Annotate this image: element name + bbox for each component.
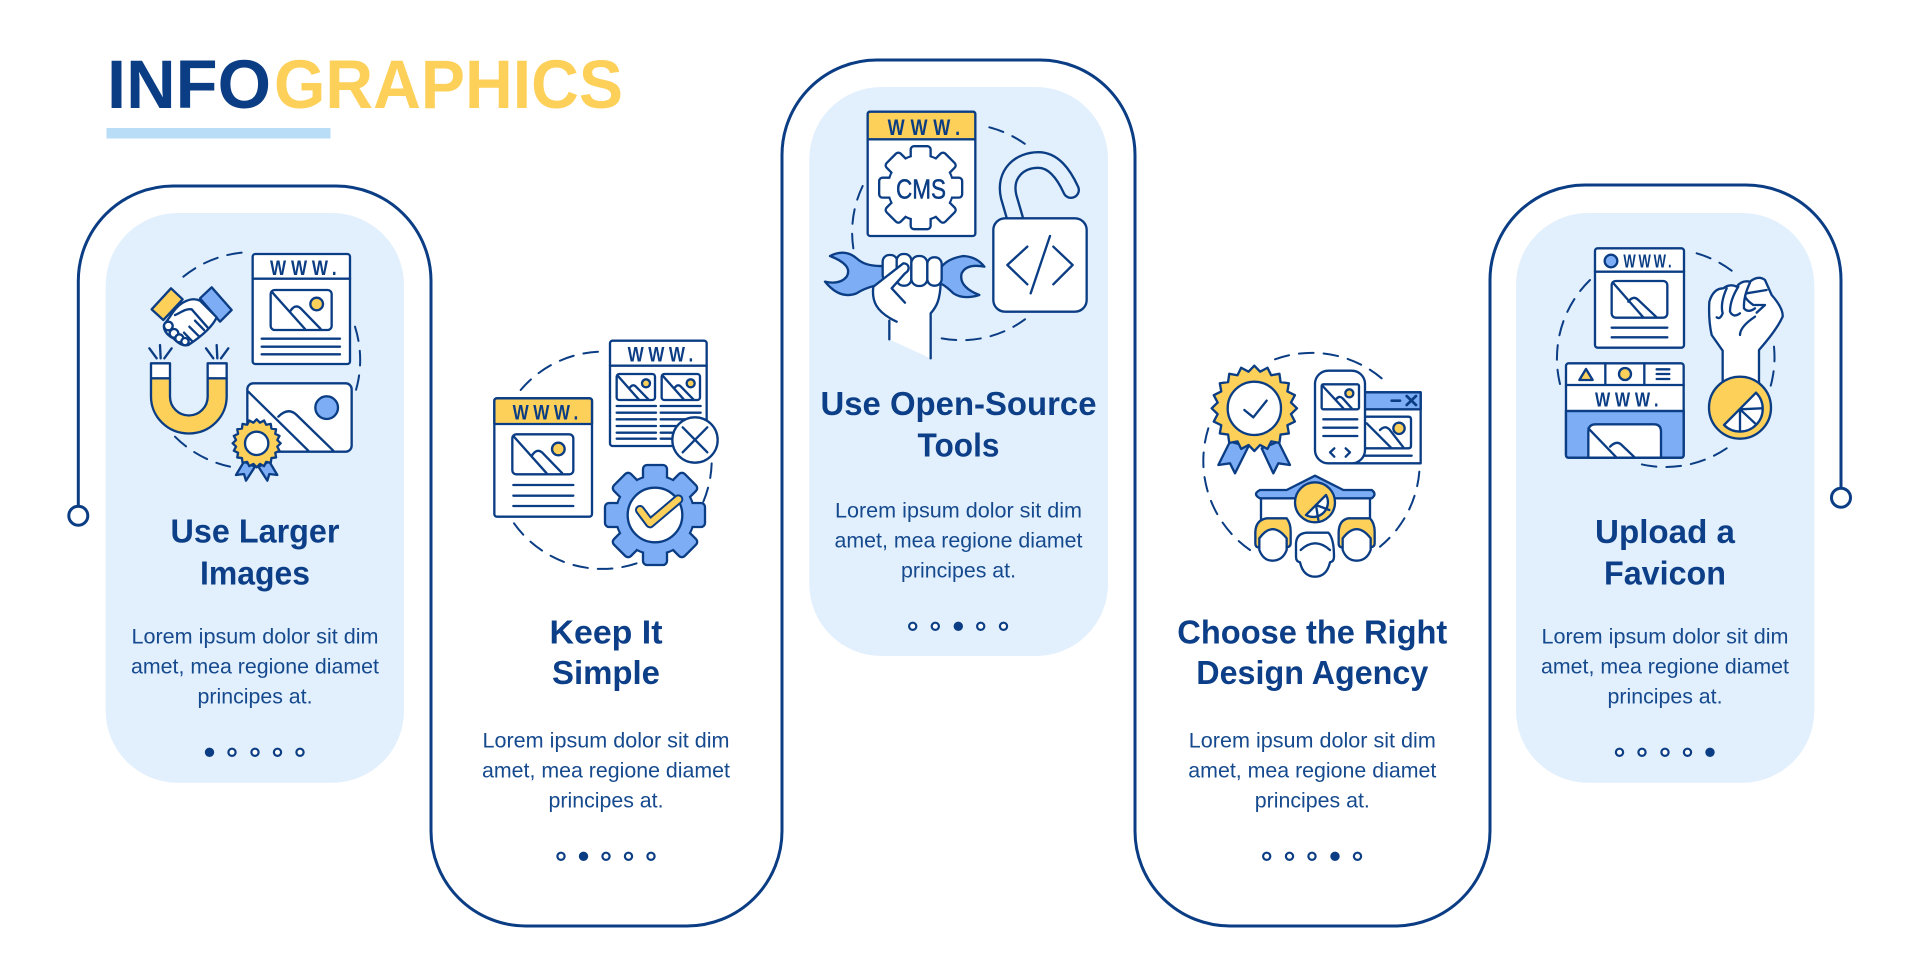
description (482, 728, 730, 812)
left end dot (69, 506, 88, 525)
heading: Tools (918, 428, 1000, 465)
description (1188, 728, 1436, 812)
description: principes at. (901, 558, 1016, 582)
description: Lorem ipsum dolor sit dim (1189, 728, 1436, 752)
description: Lorem ipsum dolor sit dim (482, 728, 730, 752)
heading (170, 514, 340, 592)
icon: CMS page, wrench, open lock: CMS (896, 173, 946, 204)
heading: Simple (552, 655, 660, 692)
description: principes at. (1255, 788, 1370, 812)
title: GRAPHICS (274, 46, 623, 123)
description (131, 624, 379, 708)
heading: Choose the Right (1177, 614, 1447, 651)
step indicator dots (557, 853, 655, 860)
panel: use larger images (106, 213, 404, 783)
heading (1177, 614, 1447, 692)
description: amet, mea regione diamet (131, 654, 379, 678)
heading: Images (200, 555, 310, 592)
icon: web pages and gear (494, 341, 718, 569)
description: amet, mea regione diamet (834, 528, 1083, 552)
panel: upload a favicon (1516, 213, 1814, 783)
title (107, 46, 623, 123)
panel background (809, 87, 1108, 656)
description: amet, mea regione diamet (482, 758, 730, 782)
description: amet, mea regione diamet (1188, 758, 1436, 782)
title: INFO (107, 46, 271, 123)
icon: web pages and gear: WWW. (628, 344, 693, 367)
icon: CMS page, wrench, open lock: WWW. (888, 116, 960, 140)
heading: Upload a (1595, 514, 1735, 551)
heading (820, 386, 1096, 465)
icon: favicon browser pages and fist: WWW. (1595, 388, 1658, 411)
heading: Use Open-Source (820, 386, 1096, 423)
panel background (1516, 213, 1814, 783)
panel: use open-source tools (809, 87, 1108, 656)
step indicator dots (206, 749, 304, 756)
panel background (106, 213, 404, 783)
description: amet, mea regione diamet (1541, 654, 1789, 678)
icon: award, devices, team (1203, 353, 1421, 577)
icon: favicon browser pages and fist: WWW. (1623, 251, 1672, 272)
description: Lorem ipsum dolor sit dim (132, 624, 378, 648)
description: principes at. (198, 684, 312, 708)
icon: favicon browser pages and fist (1557, 248, 1783, 467)
panel: keep it simple (482, 341, 730, 860)
icon: web pages and gear: WWW. (513, 402, 578, 425)
heading: Use Larger (170, 514, 340, 551)
description (834, 498, 1083, 582)
description: principes at. (1608, 684, 1722, 708)
heading: Favicon (1604, 555, 1726, 592)
icon: CMS page, wrench, open lock (825, 112, 1087, 358)
heading (550, 614, 662, 692)
icon: magnet, handshake, web page (149, 253, 360, 481)
panel: choose the right design agency (1177, 353, 1447, 860)
heading: Keep It (550, 614, 662, 651)
icon: magnet, handshake, web page: WWW. (270, 257, 337, 281)
description: principes at. (548, 788, 664, 812)
description: Lorem ipsum dolor sit dim (835, 498, 1082, 522)
description (1541, 624, 1789, 708)
description: Lorem ipsum dolor sit dim (1542, 624, 1788, 648)
step indicator dots (1616, 749, 1714, 756)
heading: Design Agency (1196, 655, 1429, 692)
title underline bar (106, 128, 330, 138)
heading (1595, 514, 1735, 592)
right end dot (1832, 488, 1850, 507)
step indicator dots (1263, 853, 1361, 860)
step indicator dots (909, 623, 1007, 630)
